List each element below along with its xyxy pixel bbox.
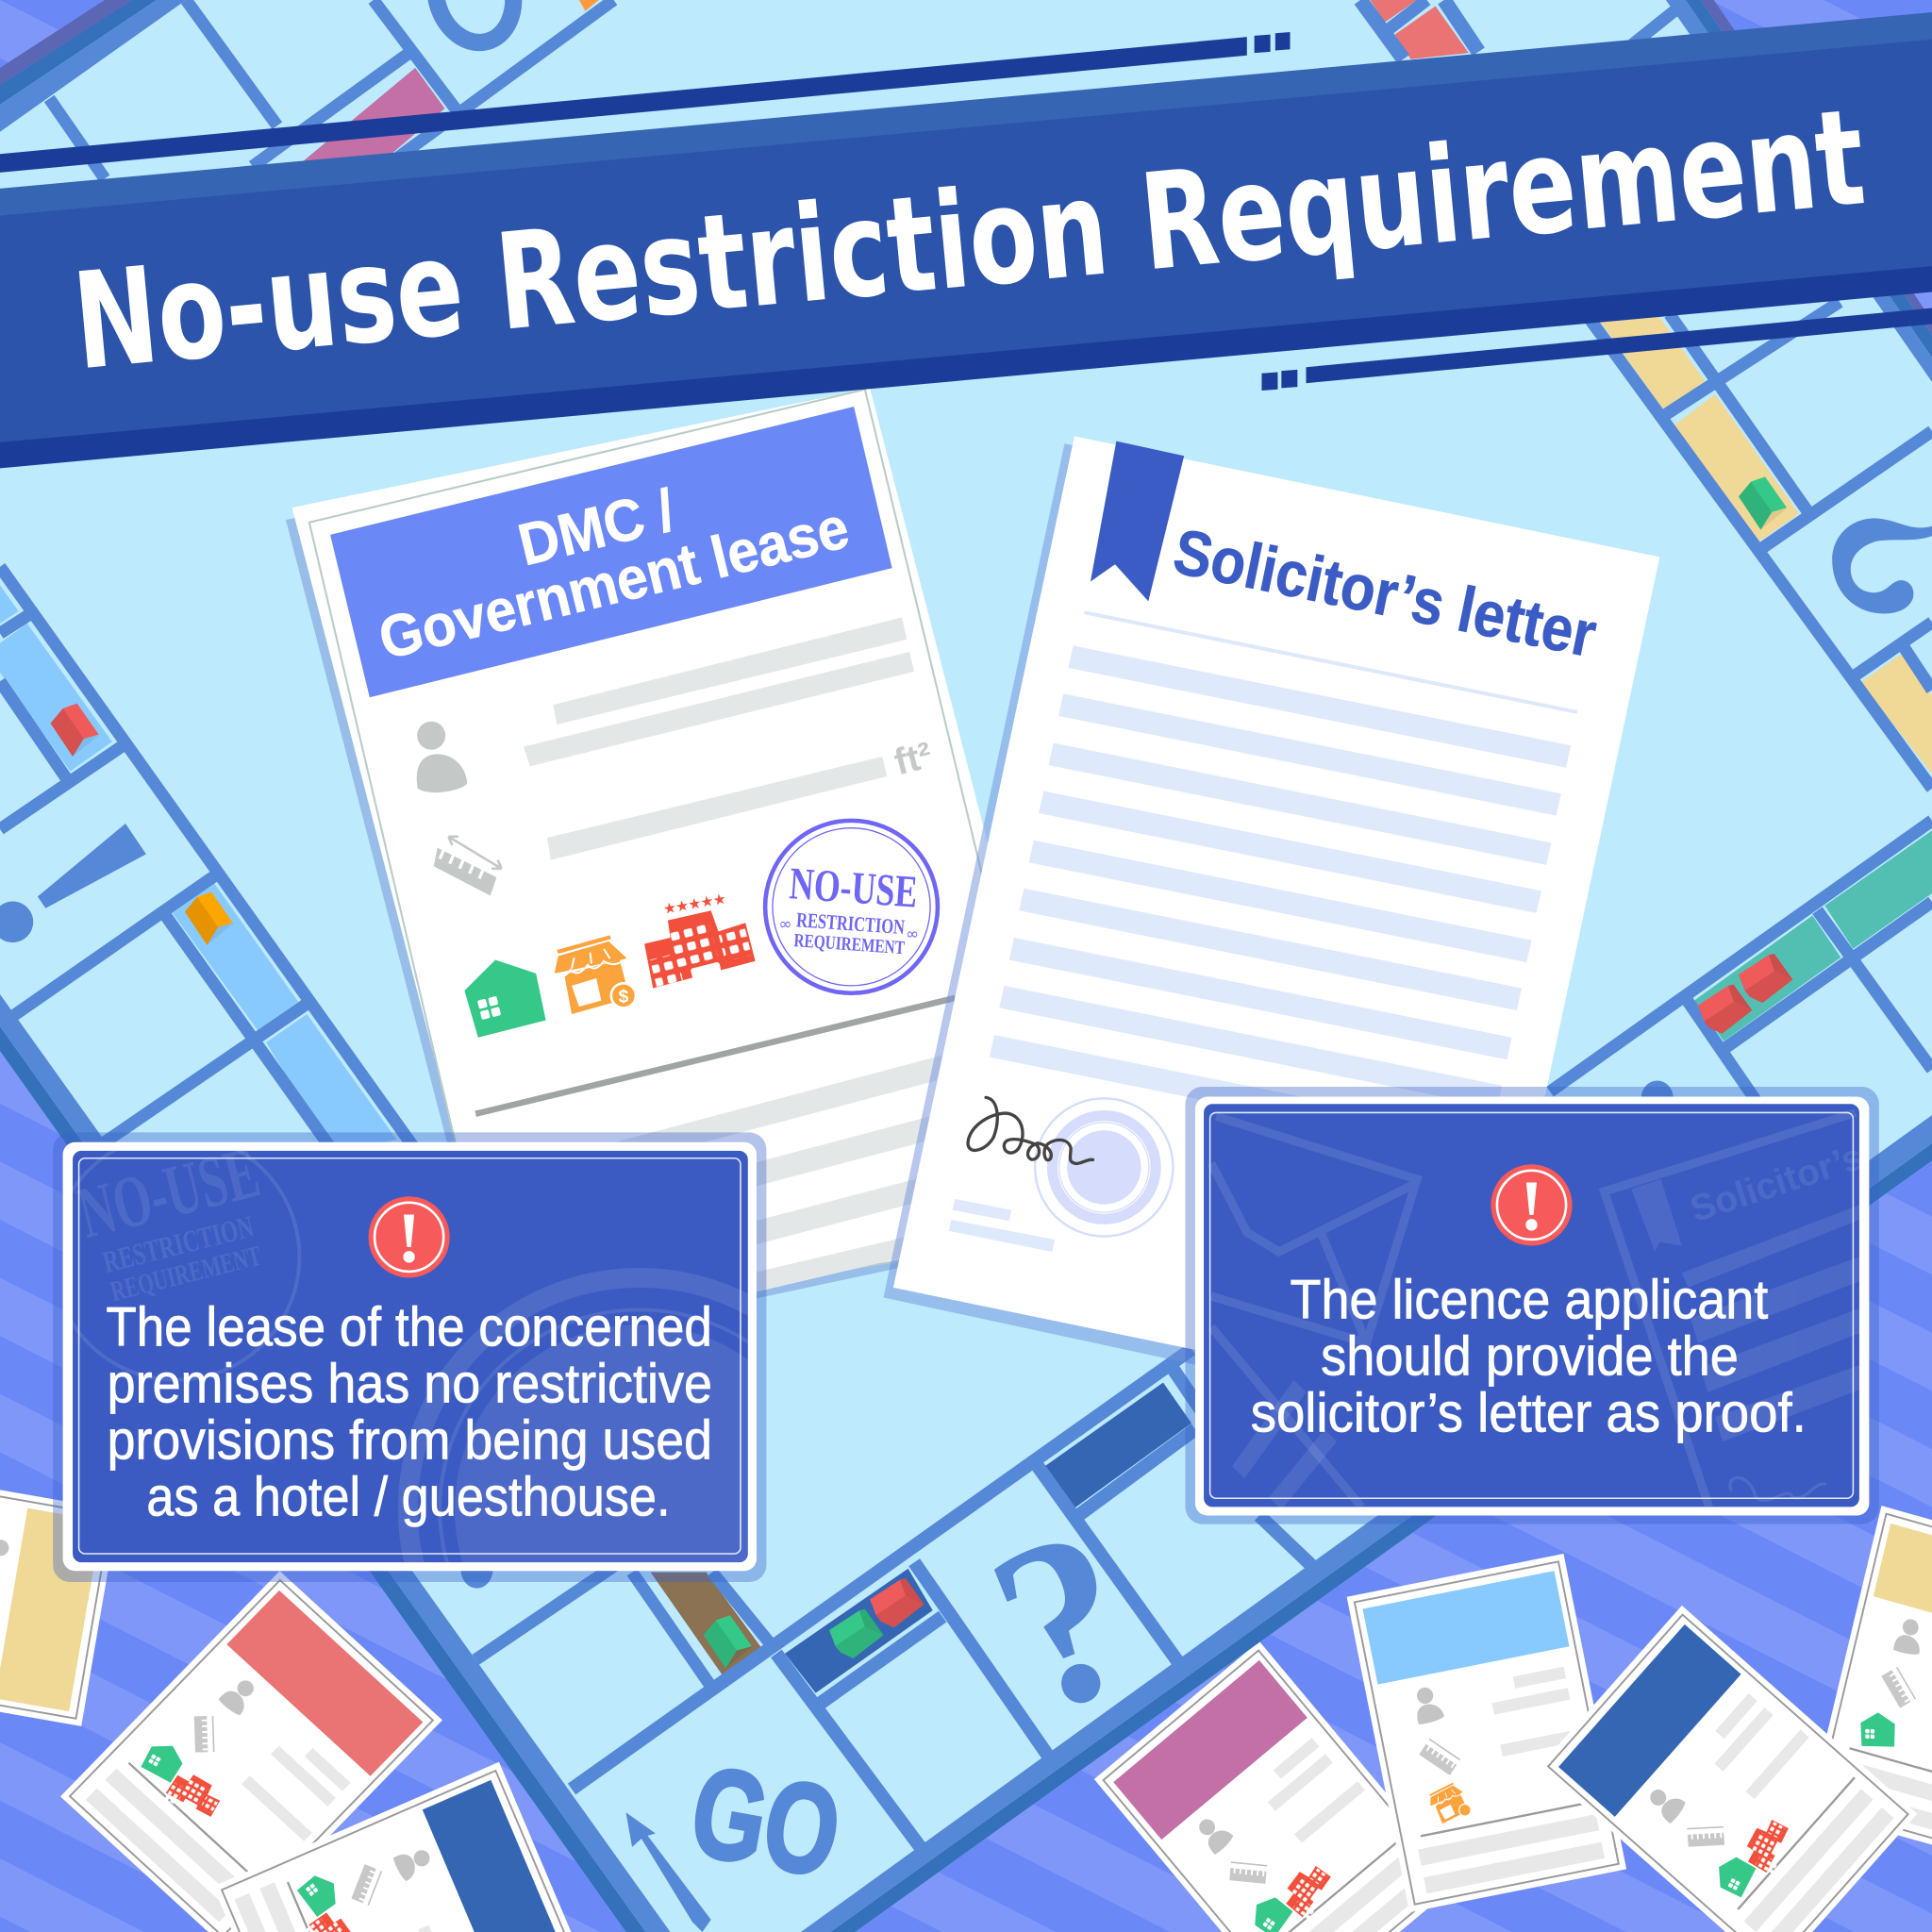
panel blue fill — [1204, 1104, 1859, 1507]
banner main band — [0, 40, 1932, 454]
lease placeholder lines — [518, 617, 1010, 1306]
panel text — [106, 1296, 712, 1528]
document: DMC / Government lease — [286, 388, 1086, 1353]
lease divider — [475, 998, 955, 1114]
panel watermark envelope and letter: Solicitor’s — [1686, 1137, 1868, 1230]
panel watermark stamp and rings — [73, 1151, 747, 1562]
seal — [1035, 1098, 1173, 1237]
no-use restriction stamp — [765, 821, 938, 993]
callout panel: lease — [53, 1132, 766, 1582]
panel text: as a hotel / guesthouse. — [146, 1467, 671, 1528]
document: light blue — [1347, 1554, 1626, 1912]
panel outer glow — [1185, 1087, 1879, 1524]
scattered documents at the bottom — [0, 1457, 1932, 1932]
lease heading: Government lease — [373, 494, 855, 673]
ft2 label: ft² — [891, 735, 936, 783]
document: yellow right — [1808, 1506, 1932, 1869]
letter heading: Solicitor’s letter — [1168, 516, 1602, 671]
letter shadow — [883, 443, 1651, 1424]
document: Solicitor's letter — [883, 436, 1659, 1424]
panel blue fill — [73, 1151, 748, 1562]
signature — [968, 1097, 1092, 1163]
panel white frame — [1195, 1096, 1869, 1516]
icon: person — [417, 722, 467, 792]
callout panel: solicitor — [1185, 1087, 1879, 1524]
lease inner border — [309, 390, 1068, 1328]
icon: warning — [1491, 1164, 1573, 1246]
house: green top right — [1739, 476, 1788, 530]
document: pink — [1094, 1641, 1460, 1932]
panel watermark stamp and rings: NO-USE — [70, 1130, 267, 1254]
title banner — [0, 12, 1932, 468]
bumps peeking above panels — [460, 1080, 1674, 1589]
icon: shop: $ — [618, 987, 628, 1008]
icon: hotel — [643, 890, 757, 999]
house: green on brown — [704, 1615, 753, 1668]
question mark on board: ? — [958, 1475, 1170, 1767]
panel text: solicitor’s letter as proof. — [1251, 1383, 1807, 1444]
panel inner rule — [1210, 1112, 1853, 1498]
icon: shop — [555, 935, 637, 1014]
panel inner rule — [79, 1158, 741, 1554]
board house pieces — [51, 476, 1792, 1668]
panel outer glow — [53, 1132, 766, 1582]
panel text — [1251, 1270, 1807, 1444]
top accent line — [0, 32, 1291, 173]
house: orange — [185, 892, 234, 945]
house: red right 1 — [1698, 985, 1752, 1034]
no-use restriction stamp: ∞ — [906, 924, 919, 943]
panel white frame — [63, 1142, 757, 1571]
lease sheet — [292, 388, 1086, 1341]
lease shadow — [286, 397, 1078, 1353]
lower accent line — [1261, 308, 1932, 391]
lease heading: DMC / — [512, 477, 681, 578]
panel text: should provide the — [1321, 1326, 1739, 1388]
panel text: premises has no restrictive — [108, 1353, 712, 1414]
house: red left — [51, 704, 100, 757]
banner top highlight — [0, 12, 1932, 225]
no-use restriction stamp: RESTRICTION — [795, 908, 906, 939]
panel watermark stamp and rings: RESTRICTION — [100, 1209, 258, 1280]
panel text: The licence applicant — [1291, 1270, 1768, 1331]
document: red — [60, 1571, 442, 1932]
document: navy left — [213, 1762, 585, 1932]
decorative top O mark — [425, 0, 524, 51]
banner lower shade — [0, 266, 1932, 468]
icon: green house — [464, 959, 546, 1038]
no-use restriction stamp: NO-USE — [788, 858, 919, 918]
letter sheet — [893, 436, 1659, 1408]
lease header band — [330, 407, 892, 697]
panel text: The lease of the concerned — [106, 1296, 712, 1357]
GO label on board: GO — [681, 1740, 850, 1905]
icon: warning: ! — [1520, 1167, 1543, 1246]
letter rule — [1084, 612, 1577, 712]
panel watermark envelope and letter — [1211, 1112, 1868, 1509]
document: navy right — [1539, 1606, 1917, 1932]
panel watermark stamp and rings: REQUIREMENT — [108, 1241, 264, 1307]
icon: warning: ! — [397, 1198, 421, 1277]
letter text lines — [949, 645, 1571, 1252]
icon: bookmark ribbon — [1091, 441, 1184, 601]
icon: warning — [369, 1196, 450, 1277]
arrow on GO square — [626, 1812, 711, 1932]
icon: hotel: ★★★★★ — [661, 890, 727, 918]
no-use restriction stamp: ∞ — [778, 915, 792, 934]
no-use restriction stamp: REQUIREMENT — [793, 930, 906, 958]
panel text: provisions from being used — [108, 1409, 712, 1471]
icon: ruler — [434, 837, 502, 896]
house: red right 2 — [1739, 954, 1792, 1003]
house: red on navy — [870, 1578, 924, 1627]
document: yellow left — [0, 1457, 118, 1726]
decorative right curl mark — [1832, 518, 1932, 613]
house: green on navy — [829, 1609, 883, 1658]
